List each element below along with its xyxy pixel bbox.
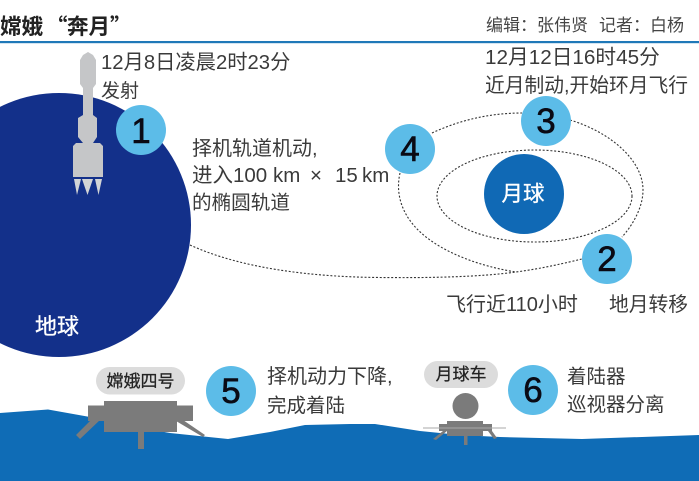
earth (0, 93, 191, 357)
separation text: 巡视器分离 (567, 394, 665, 416)
step 3 marker (521, 96, 571, 146)
step 1 marker: 1 (131, 112, 151, 151)
credits: 记者：白杨 (599, 11, 684, 36)
orbit manoeuvre text: × (310, 164, 322, 187)
orbit manoeuvre text: km (362, 164, 389, 187)
inner lunar orbit (437, 150, 632, 242)
separation text: 着陆器 (567, 366, 626, 388)
transfer text: 地月转移 (609, 294, 688, 316)
lunar braking text: 12月12日16时45分 (485, 46, 660, 69)
step 2 marker (582, 234, 632, 284)
heading: 嫦娥 (0, 10, 44, 41)
Chang'e-4 label (96, 367, 185, 394)
earth: 地球 (35, 314, 79, 339)
step 5 marker (206, 366, 256, 416)
moon (484, 154, 564, 234)
heading: ” (110, 10, 132, 41)
icon: rover on lander (423, 393, 506, 445)
flight time text: 飞行近110小时 (446, 293, 578, 316)
landing text: 完成着陆 (267, 395, 345, 417)
orbit manoeuvre text: 进入100 (192, 164, 267, 187)
landing text: 择机动力下降, (267, 365, 393, 388)
step 2 marker: 2 (597, 240, 617, 279)
icon: lander (76, 401, 205, 449)
header rule (0, 41, 699, 43)
landing text (267, 365, 393, 417)
icon: rocket (73, 52, 103, 177)
heading: “ (46, 10, 68, 41)
launch text: 12月8日凌晨2时23分 (101, 51, 290, 74)
step 4 marker (385, 124, 435, 174)
transfer orbit from earth (190, 245, 582, 278)
ground: lunar surface (0, 410, 699, 481)
icon: rocket flames (74, 179, 102, 195)
step 6 marker: 6 (523, 371, 543, 410)
orbit manoeuvre text: 择机轨道机动, (192, 137, 318, 160)
launch text: 发射 (101, 80, 139, 102)
lunar rover label: 月球车 (436, 365, 486, 384)
lunar braking text: 近月制动,开始环月飞行 (485, 75, 688, 97)
lunar braking text (485, 46, 688, 97)
heading: 奔月 (67, 10, 110, 41)
step 1 marker (116, 105, 166, 155)
separation text (567, 366, 665, 416)
orbit manoeuvre text (192, 137, 389, 214)
step 4 marker: 4 (400, 130, 420, 169)
step 6 marker (508, 365, 558, 415)
step 5 marker: 5 (221, 372, 241, 411)
outer lunar orbit (399, 113, 643, 272)
Chang'e-4 label: 嫦娥四号 (106, 372, 174, 391)
orbit manoeuvre text: 15 (335, 164, 358, 187)
step 3 marker: 3 (536, 102, 556, 141)
moon: 月球 (501, 182, 545, 206)
credits: 编辑：张伟贤 (486, 11, 588, 36)
orbit manoeuvre text: 的椭圆轨道 (192, 192, 290, 214)
lunar rover label (424, 361, 498, 388)
orbit manoeuvre text: km (273, 164, 300, 187)
launch text (101, 51, 290, 102)
